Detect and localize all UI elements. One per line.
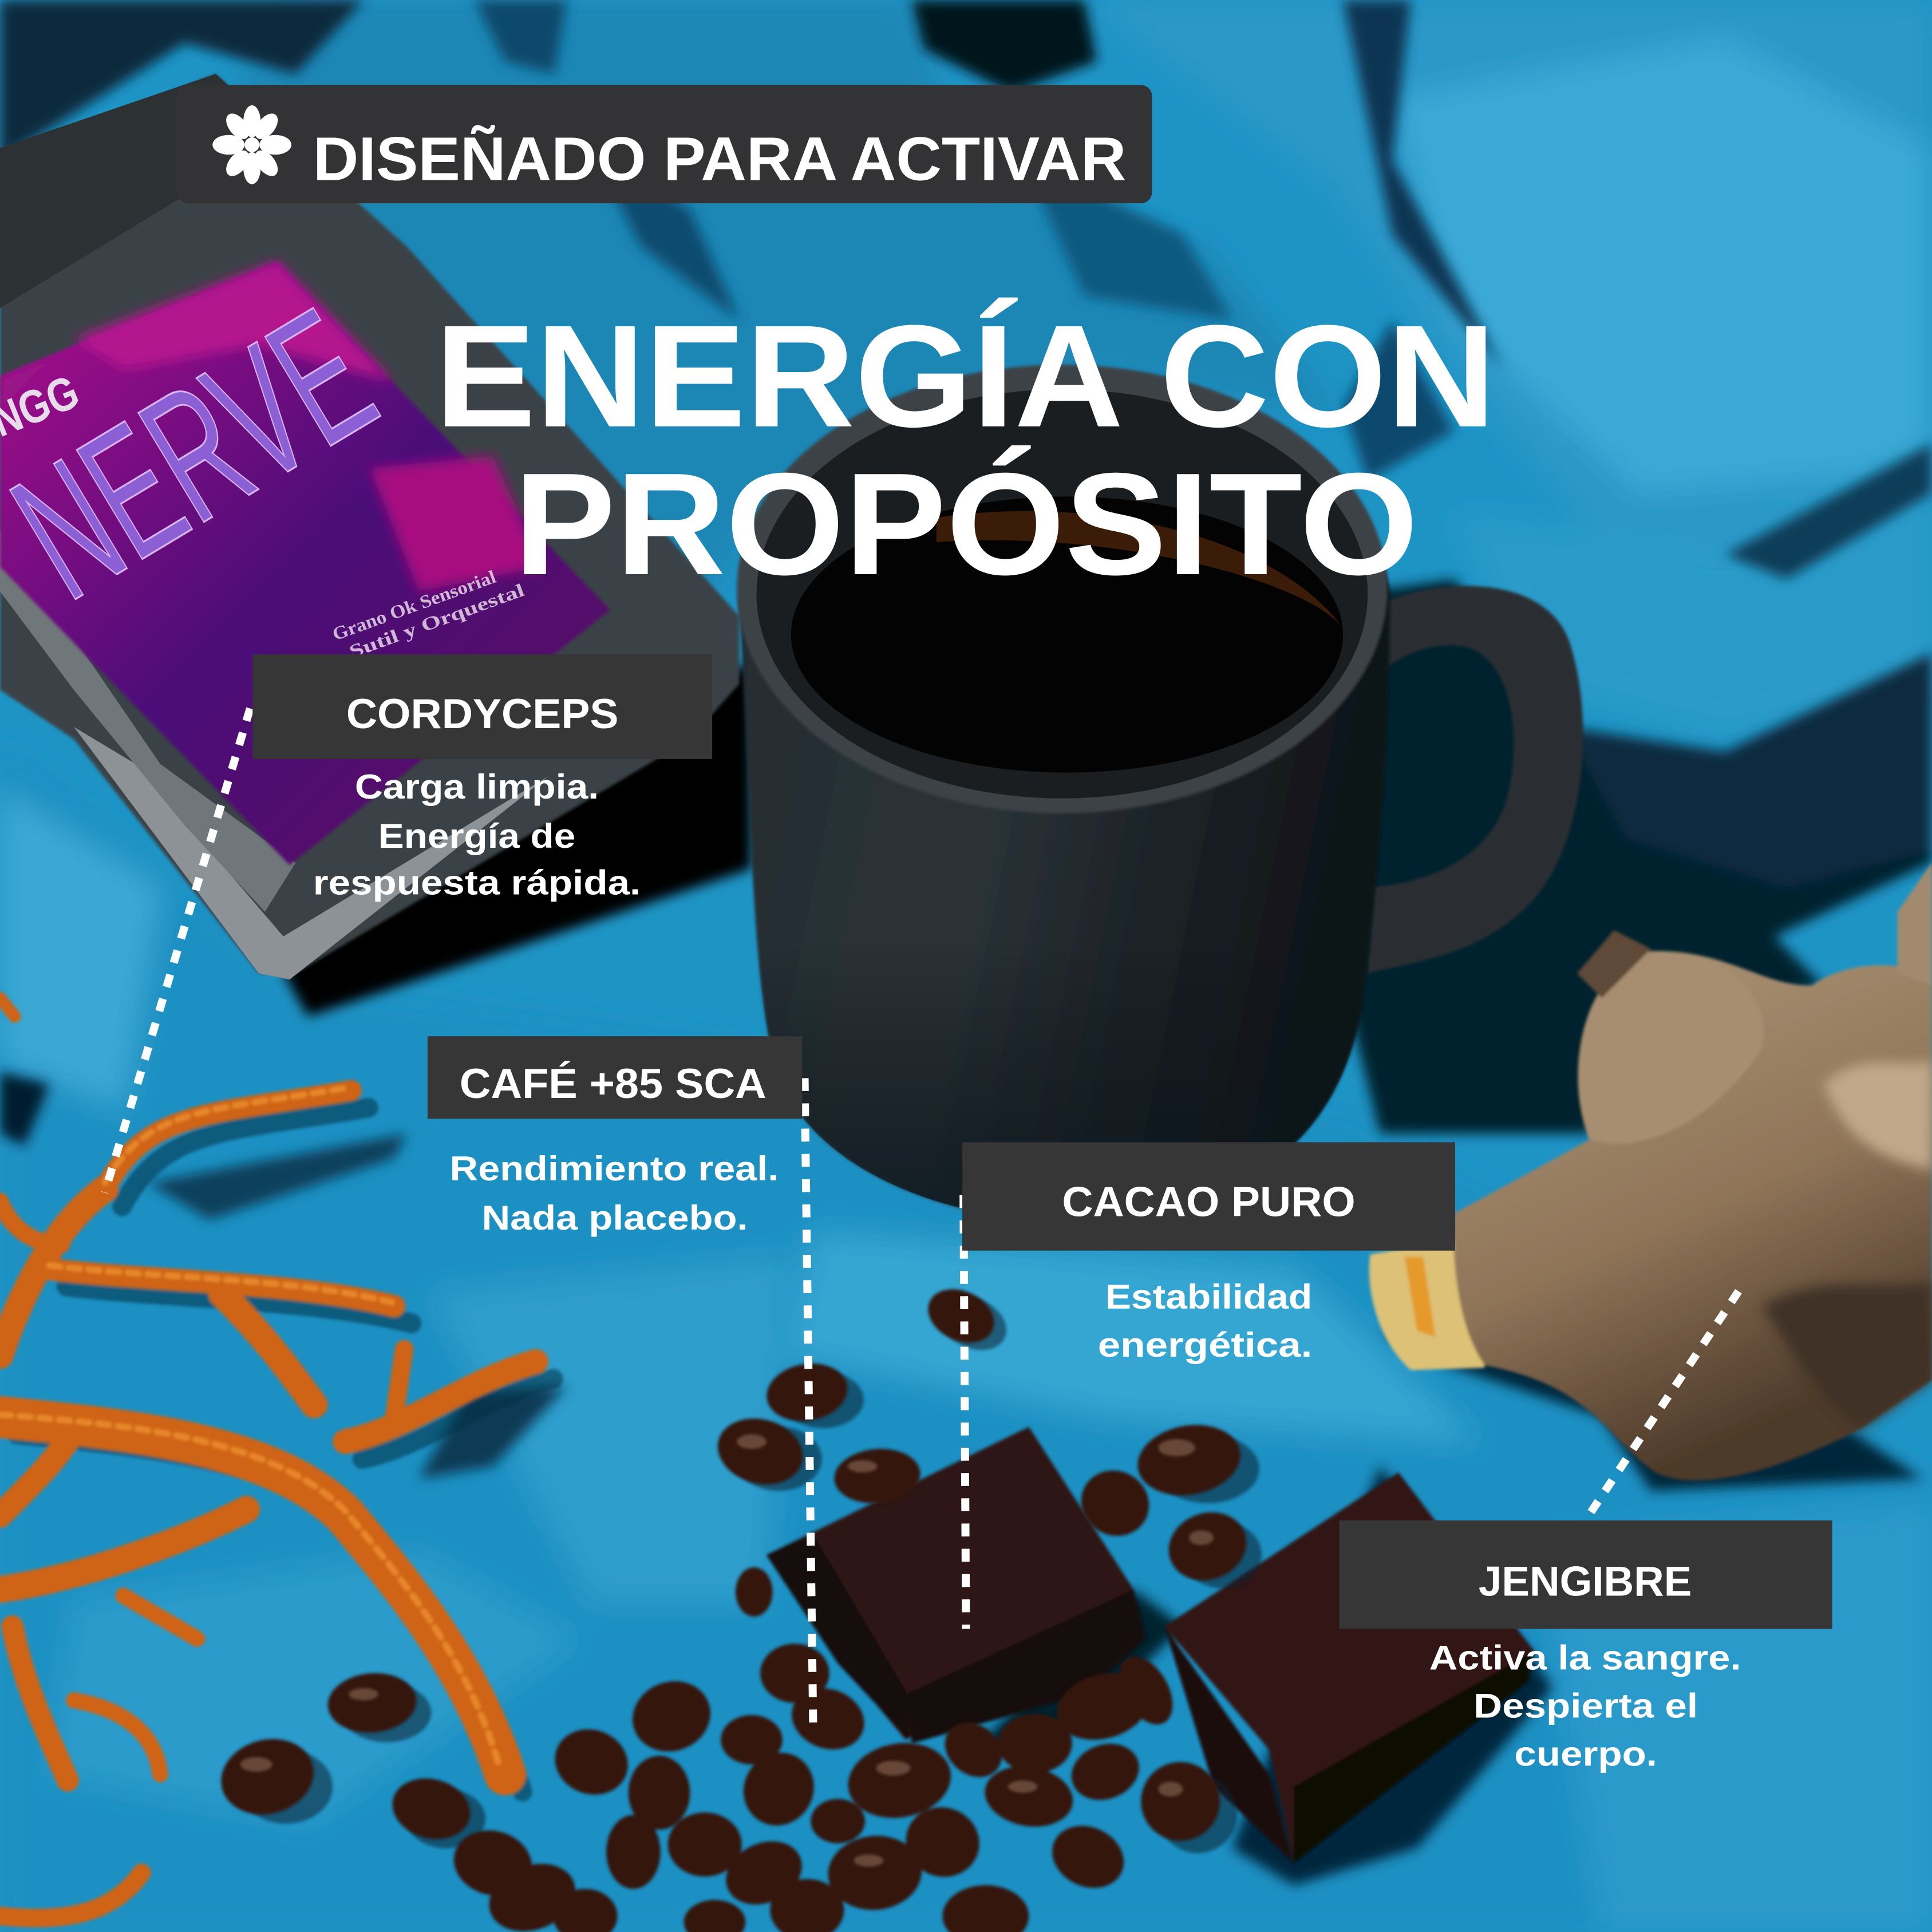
- mug: [737, 365, 1583, 1222]
- dotted line: cafe: [805, 1078, 813, 1731]
- coffee bag: [0, 74, 739, 979]
- icon: white flower: [212, 105, 291, 184]
- badge text: DISEÑADO PARA ACTIVAR: [313, 124, 1126, 193]
- panel: jengibre: [1340, 1520, 1832, 1773]
- panel: cacao: [962, 1142, 1455, 1364]
- label text: CORDYCEPS: [346, 690, 619, 737]
- mug body: [739, 422, 1390, 1222]
- bag small text: Grano Ok Sensorial: [330, 566, 499, 645]
- title: PROPÓSITO: [514, 442, 1418, 605]
- description: cuerpo.: [1514, 1734, 1657, 1773]
- dotted line: jengibre: [1587, 1291, 1739, 1518]
- ginger: [1369, 863, 1932, 1480]
- label text: CACAO PURO: [1062, 1178, 1356, 1225]
- description: energética.: [1098, 1325, 1312, 1364]
- mug handle: [1368, 586, 1583, 973]
- cordyceps: [0, 998, 553, 1918]
- bag small text: Sutil y Orquestal: [346, 579, 527, 662]
- coffee: [791, 496, 1343, 773]
- description: Nada placebo.: [482, 1198, 748, 1237]
- label bar: [428, 1036, 802, 1119]
- description: [450, 1149, 779, 1237]
- title: [435, 295, 1496, 605]
- description: Carga limpia.: [355, 767, 599, 806]
- bag label: [0, 261, 610, 865]
- panel: cordyceps: [252, 654, 712, 902]
- panel: cafe: [428, 1036, 802, 1237]
- description: [1429, 1638, 1741, 1773]
- label bar: [1340, 1520, 1832, 1629]
- header badge: [177, 85, 1152, 203]
- bag product name: NERVE: [0, 271, 405, 638]
- description: Estabilidad: [1105, 1277, 1312, 1316]
- chocolate blocks: [767, 1427, 1534, 1863]
- description: respuesta rápida.: [313, 863, 641, 902]
- bag small text: [330, 559, 527, 665]
- description: [1098, 1277, 1312, 1364]
- shadow under the bag: [283, 665, 752, 1017]
- label text: CAFÉ +85 SCA: [460, 1060, 767, 1107]
- description: Despierta el: [1473, 1686, 1698, 1725]
- mug rim: [737, 365, 1388, 813]
- label bar: [252, 654, 712, 759]
- description: Energía de: [378, 816, 575, 855]
- dotted line: cordyceps: [105, 709, 250, 1193]
- description: Activa la sangre.: [1429, 1638, 1741, 1677]
- label text: JENGIBRE: [1479, 1558, 1692, 1605]
- coffee beans: [212, 1279, 1262, 1932]
- mug interior: [757, 389, 1368, 799]
- description: Rendimiento real.: [450, 1149, 779, 1188]
- title: ENERGÍA CON: [435, 295, 1496, 457]
- dotted line: cacao: [963, 1195, 966, 1629]
- description: [313, 767, 641, 902]
- label bar: [962, 1142, 1455, 1251]
